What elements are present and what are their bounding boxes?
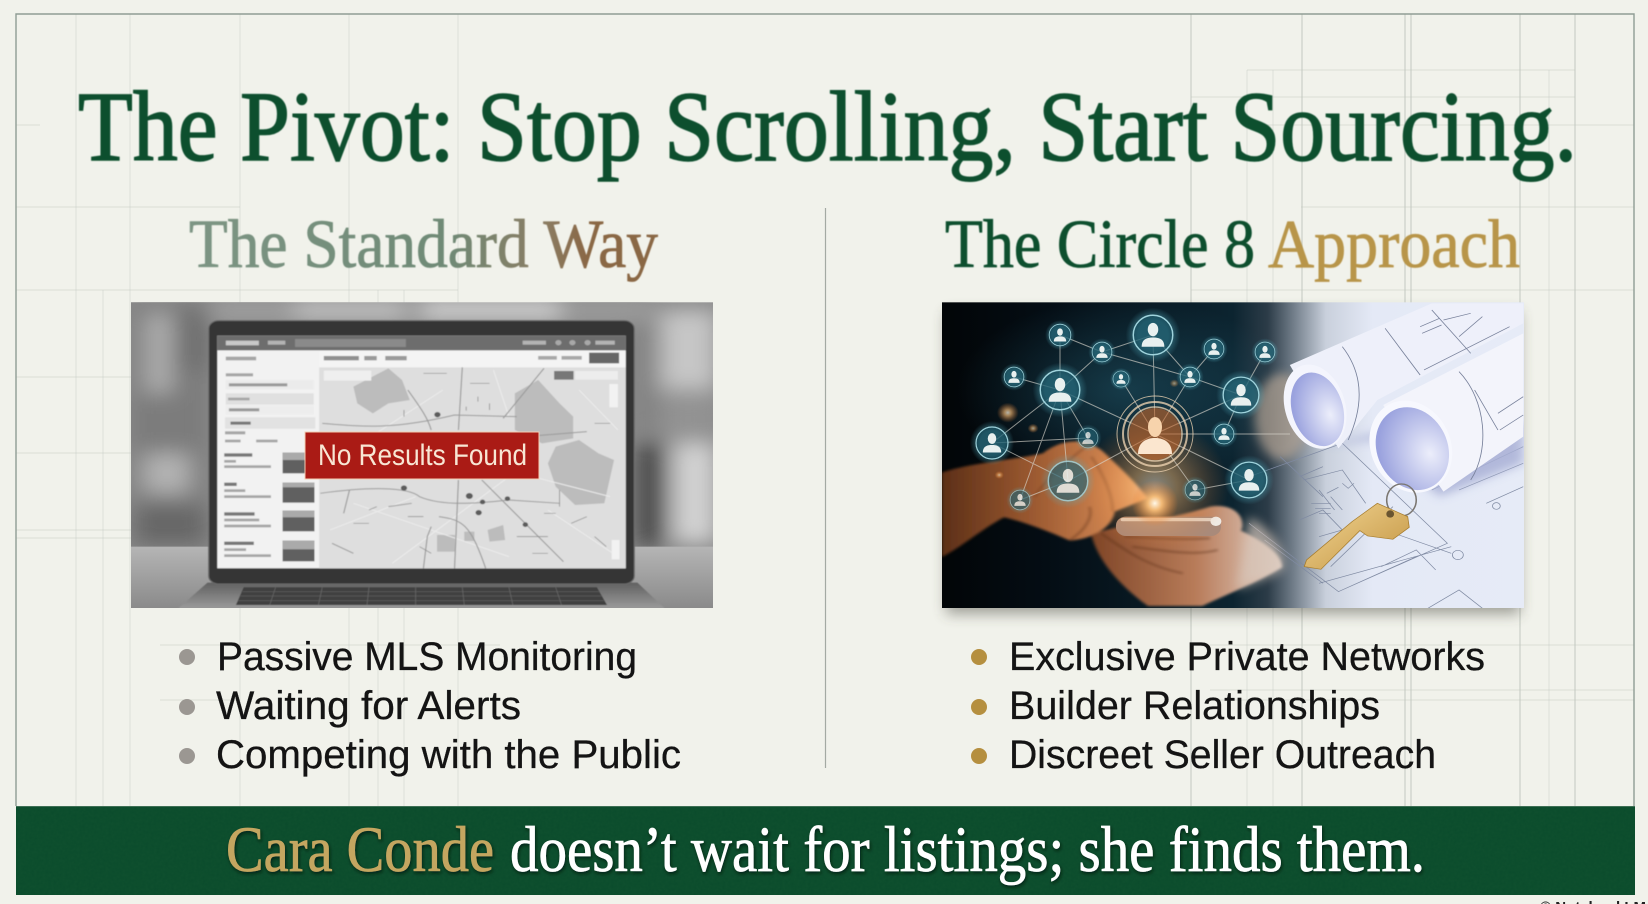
callout: no results found <box>305 432 539 479</box>
photo shadow <box>946 312 1520 614</box>
heading: the circle 8 approach <box>945 206 1520 282</box>
phone <box>1116 517 1221 536</box>
banner statement: Cara Conde <box>226 814 494 886</box>
photo: laptop with map search <box>131 300 717 608</box>
bullet list: standard way <box>179 635 681 777</box>
network lines <box>992 335 1290 500</box>
bullet list: circle 8 approach <box>971 635 1485 777</box>
roll shadow <box>1319 423 1523 497</box>
hands <box>942 441 1282 606</box>
network person nodes <box>970 308 1279 514</box>
footer banner <box>16 806 1635 895</box>
heading: the circle 8 approach: Approach <box>1268 206 1520 282</box>
panel: the standard way <box>131 206 717 777</box>
light glow <box>1100 429 1224 542</box>
banner statement: doesn’t wait for listings; she finds them. <box>510 814 1425 886</box>
bullet list: standard way: Competing with the Public <box>216 733 681 777</box>
panel: the circle 8 approach <box>942 206 1524 777</box>
callout: no results found: No Results Found <box>318 439 527 472</box>
network center node <box>1129 408 1181 460</box>
blueprint roll front <box>1383 333 1523 492</box>
bullet list: circle 8 approach: Discreet Seller Outreach <box>1009 733 1436 777</box>
heading: the standard way: The Standard Way <box>189 206 658 282</box>
bullet list: circle 8 approach: Builder Relationships <box>1009 684 1380 728</box>
map <box>319 367 626 568</box>
center divider <box>824 208 826 768</box>
heading: the circle 8 approach: The Circle 8 <box>945 206 1255 282</box>
bullet list: standard way: Waiting for Alerts <box>216 684 521 728</box>
blueprint sheet lines <box>1249 443 1523 608</box>
sidebar listings <box>224 357 315 557</box>
blueprint roll back <box>1290 303 1523 448</box>
laptop body <box>178 321 665 608</box>
photo: network, hands, blueprints and key <box>942 297 1524 608</box>
bullet list: circle 8 approach: Exclusive Private Networks <box>1009 635 1485 679</box>
banner statement <box>226 814 1425 886</box>
key <box>1387 484 1416 516</box>
bullet list: standard way: Passive MLS Monitoring <box>217 635 637 679</box>
network glow rings <box>1117 396 1193 472</box>
